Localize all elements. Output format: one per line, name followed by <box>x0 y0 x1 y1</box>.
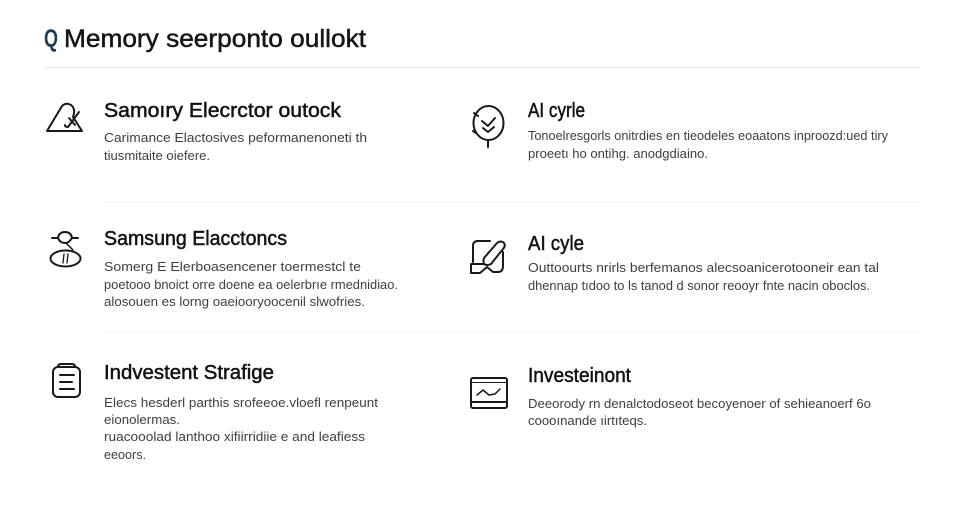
text block: memory outlook: Carimance Elactosives peformanenoneti th <box>104 130 367 145</box>
icon: monitor with trend line <box>471 378 507 408</box>
text block: Samsung Electronics: Somerg E Elerboasencener toermestcl te <box>104 259 361 274</box>
icon: clipboard <box>53 364 80 397</box>
text block: investment: Deeorody rn denalctodoseot becoyenoer of sehieanoerf 6o <box>528 396 871 411</box>
text block: memory outlook <box>104 130 367 163</box>
icon: person over disc <box>50 232 80 266</box>
heading: investment strategy: Indvestent Strafige <box>104 362 274 384</box>
heading: AI cycle top: AI cyrle <box>528 100 585 122</box>
text block: investment strategy: eeoors. <box>104 447 146 462</box>
title: Memory seerponto oullokt <box>64 25 366 53</box>
text block: investment strategy: ruacooolad lanthoo xifiirridiie e and leafiess <box>104 429 366 444</box>
heading: Samsung Electronics: Samsung Elacctoncs <box>104 228 287 250</box>
heading: investment: Investeinont <box>528 365 631 387</box>
text block: memory outlook: tiusmitaite oiefere. <box>104 148 210 163</box>
text block: investment strategy: Elecs hesderl parthis srofeeoe.vloefl renpeunt <box>104 395 378 410</box>
panel: investment <box>471 365 871 428</box>
text block: investment <box>528 396 871 428</box>
heading: AI cycle bottom: AI cyle <box>528 233 584 255</box>
heading: memory outlook: Samoıry Elecrctor outock <box>104 100 342 122</box>
text block: AI cycle top: proeetı ho ontihg. anodgdiaino. <box>528 146 708 161</box>
text block: investment strategy: eionolermas. <box>104 412 180 427</box>
text block: AI cycle top <box>528 128 888 161</box>
text block: Samsung Electronics: poetooo bnoict orre doene ea oelerbrıe rmednidiao. <box>104 277 398 292</box>
panel: investment strategy <box>53 362 378 462</box>
text block: investment strategy <box>104 395 378 462</box>
text block: AI cycle top: Tonoelresgorls onitrdies en tieodeles eoaatons inproozd:ued tiry <box>528 128 888 143</box>
title: Q <box>44 25 58 53</box>
text block: AI cycle bottom <box>528 260 879 293</box>
text block: investment: coooınande ıirtıteqs. <box>528 413 647 428</box>
icon: triangle with check <box>47 104 82 131</box>
text block: AI cycle bottom: dhennap tıdoo to ls tanod d sonor reooyr fnte nacin oboclos. <box>528 278 870 293</box>
panel: AI cycle top <box>473 100 888 161</box>
text block: Samsung Electronics: alosouen es lorng oaeiooryoocenil slwofries. <box>104 294 365 309</box>
text block: AI cycle bottom: Outtoourts nrirls berfemanos alecsoanicerotooneir ean tal <box>528 260 879 275</box>
panel: AI cycle bottom <box>471 233 879 293</box>
icon: round badge with chevrons <box>473 106 504 147</box>
icon: tablet with pen and hand <box>471 241 505 273</box>
panel: memory outlook <box>47 100 367 163</box>
text block: Samsung Electronics <box>104 259 398 309</box>
panel: Samsung Electronics <box>50 228 398 309</box>
